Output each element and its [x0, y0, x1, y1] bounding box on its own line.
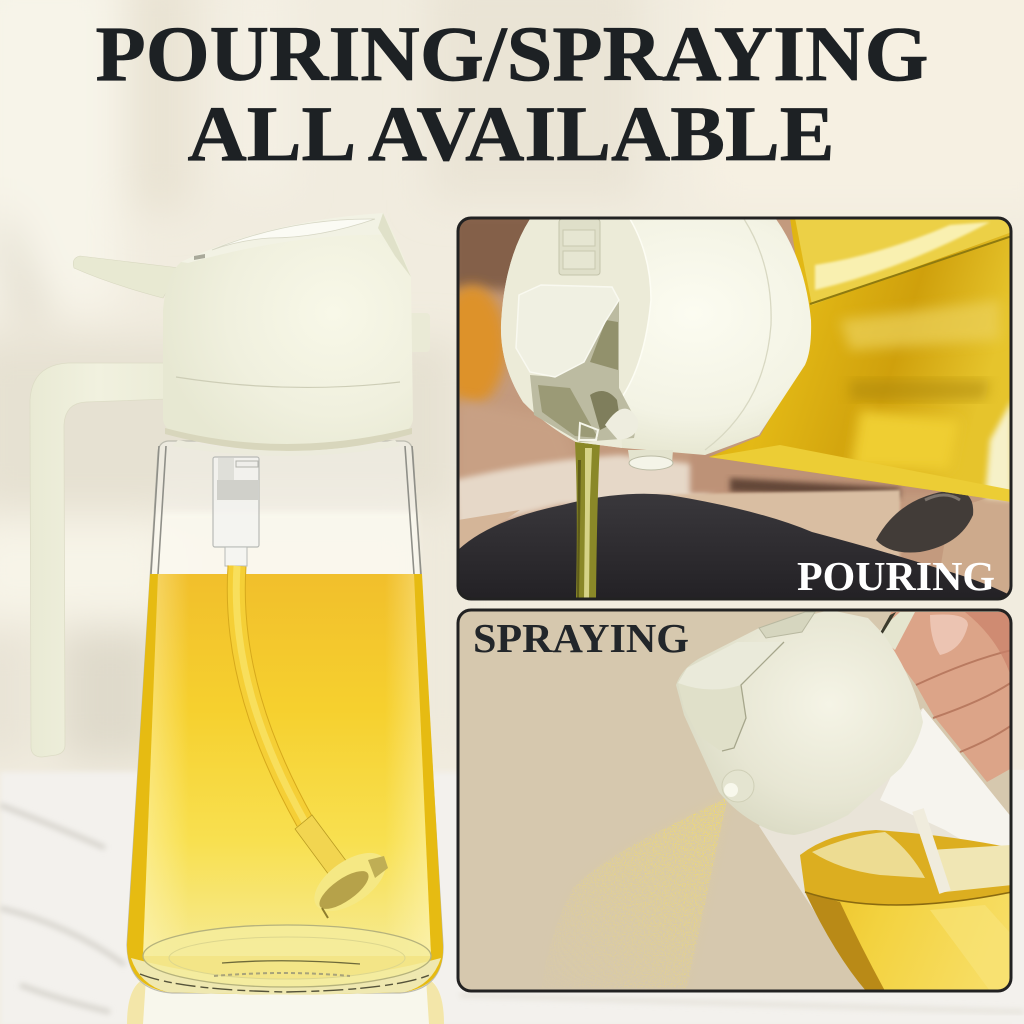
- reflection: [127, 976, 444, 1024]
- spray mist: [541, 797, 728, 988]
- flip lid: [516, 285, 619, 377]
- panel: pouring photo: [438, 210, 1024, 600]
- glass wall highlights: [151, 446, 421, 574]
- bottle product image: [30, 213, 444, 1024]
- photo background: [438, 210, 1024, 600]
- title: POURING/SPRAYING: [96, 10, 929, 97]
- pump and tube: [213, 457, 396, 923]
- label: spraying: SPRAYING: [473, 615, 689, 661]
- hand: [889, 612, 1012, 782]
- nozzle: [722, 770, 754, 802]
- side button: [408, 313, 430, 352]
- cap top face: [181, 213, 392, 263]
- label: pouring: POURING: [797, 553, 995, 599]
- bottom nozzle: [628, 450, 673, 470]
- top buttons: [759, 612, 815, 638]
- bottle oil: [709, 218, 1012, 502]
- cap: [163, 213, 413, 456]
- button top: [559, 219, 600, 275]
- base: [131, 925, 441, 994]
- cap seam line: [176, 377, 400, 387]
- oil: [127, 574, 443, 994]
- glass: [759, 708, 1008, 913]
- lever: [73, 256, 180, 298]
- handle: [30, 363, 168, 757]
- pale band behind glass: [152, 512, 419, 556]
- title: [96, 10, 929, 177]
- handle stub: [880, 612, 915, 650]
- title: ALL AVAILABLE: [188, 90, 834, 177]
- panel: spraying photo: [458, 610, 1012, 991]
- pan: [458, 490, 1012, 600]
- flip lid: [718, 686, 745, 748]
- glass body: [127, 441, 443, 993]
- oil: [800, 810, 1012, 991]
- cap: [501, 219, 811, 455]
- spout opening: [530, 300, 638, 442]
- oil stream: [575, 442, 600, 599]
- cap: [676, 610, 923, 835]
- cap underside: [165, 428, 412, 451]
